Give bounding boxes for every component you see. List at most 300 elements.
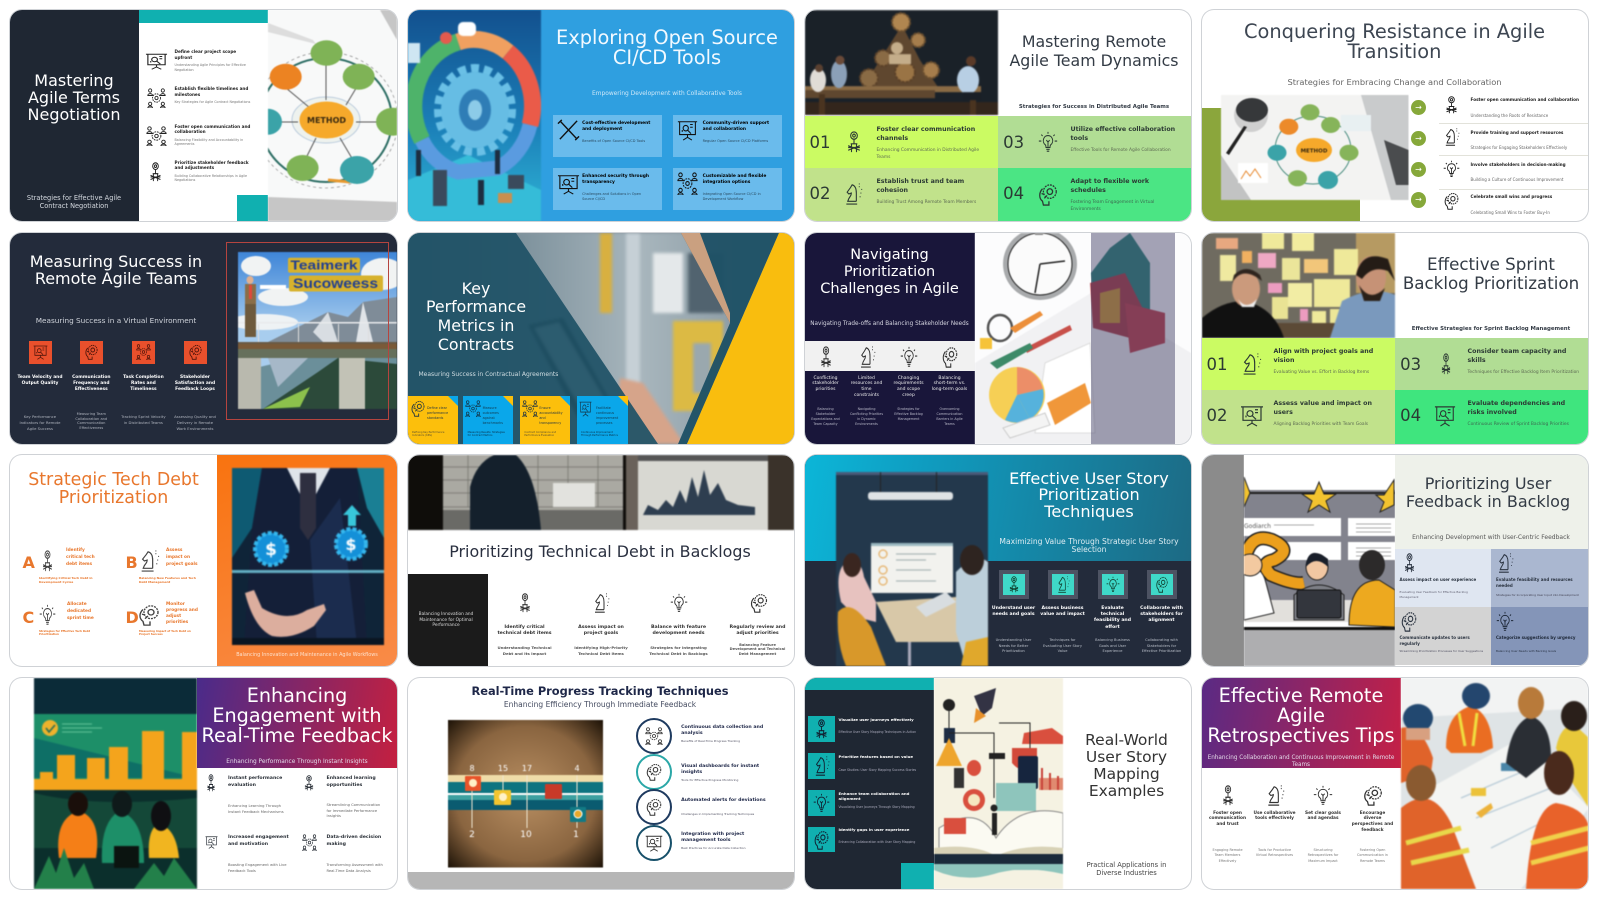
text: dedicated [67,609,91,614]
panel: Effective Remote Agile Retrospectives Tips [1202,678,1588,888]
title: Retrospectives Tips [1207,724,1395,746]
text: management tools [681,838,731,843]
quadrant 03 [1394,338,1588,390]
subtitle: Measuring Success in a Virtual Environment [36,316,196,324]
icon tile [808,716,834,742]
text: channels [876,134,908,142]
title: Examples [1089,782,1164,800]
technique 3 [636,788,794,824]
arrow 2: → [1415,134,1422,143]
text: Enhance team collaboration and [838,790,909,796]
text: Identify [66,548,85,553]
illustration: timeline on wood [448,720,602,868]
technique 4 [636,824,794,860]
icon: people [465,400,481,416]
illustration: team at laptop with stars: Godiarch [1244,523,1271,530]
quadrant 03 [998,116,1191,168]
column 2 [567,591,635,661]
title [10,254,222,288]
title: Negotiation [28,105,120,124]
photo: meeting room [836,472,988,666]
text: analysis [681,731,703,736]
quadrant 1 [1394,549,1490,607]
title [1244,20,1545,63]
box text [702,174,766,201]
column 1 [1204,784,1252,864]
icon: checklist [1438,353,1452,375]
panel: Key Performance Metrics in Contracts [408,232,794,444]
olive block [1202,108,1360,221]
title: Prioritization [844,264,935,280]
label: Understand user [992,606,1035,611]
text: opportunities [326,783,362,788]
photo: analyst at dashboards [408,455,794,530]
side box text: Performance [432,623,460,628]
label 1: Team Capacity [813,422,838,426]
subtitle: Effective Strategies for Sprint Backlog Management [1412,326,1570,332]
note: Team Members [1215,853,1240,857]
metric 3 [118,341,168,436]
metric 1 [15,341,65,436]
icon ring [636,789,672,825]
title [988,471,1190,521]
text: Assess impact on user experience [1400,577,1476,582]
text: Balancing User Needs with Backlog Goals [1496,649,1556,653]
panel: Exploring Open Source CI/CD Tools [408,10,794,221]
title: Agile Team Dynamics [1009,51,1179,70]
card 2 [463,396,513,444]
metric note [170,414,220,432]
illustration: construction team around blueprint [1400,678,1588,888]
card 4 [576,396,628,444]
step text: Involve stakeholders in decision-making [1470,162,1566,167]
photo: businessman with dollar gears: $ [345,535,357,554]
icon: person at board [205,834,218,848]
text: Categorize suggestions by urgency [1496,635,1575,640]
item D [125,601,215,641]
item text: Building Collaborative Relationships in Agile [174,174,247,178]
metric note: Key Performance [24,414,56,419]
metric note: Effectiveness [79,426,103,430]
panel: Effective User Story Prioritization Techniques [804,455,1191,666]
arrow 4 [1411,192,1426,208]
metric label: Timeliness [130,387,157,392]
photo: bridge and mountains: Teaimerk [290,257,358,272]
gradient header [197,678,397,768]
icon: board [558,175,580,194]
subtitle: Selection [1072,545,1106,554]
metric note [15,414,65,432]
title: Effective Sprint [1427,254,1555,274]
note: Measuring Impact of Tech Debt on [139,629,191,633]
metric note: Assessing Quality and [174,414,216,419]
metric note: Tracking Sprint Velocity [121,414,166,419]
title: Backlog Prioritization [1403,273,1579,293]
feature box 2 [673,115,782,157]
label: feasibility and [1094,618,1131,623]
card text: and [539,416,546,420]
title: Effective User Story [1009,469,1169,488]
metric label: Stakeholder [180,374,210,380]
metric label: Satisfaction and [175,381,215,386]
text [876,178,976,204]
item text: and adjustments [174,165,214,170]
step text [1470,130,1567,151]
text: debt items [66,562,92,567]
icon band [804,340,975,371]
item 2 [301,772,395,822]
text: cohesion [876,186,908,194]
title: Challenges in Agile [820,281,959,297]
text [1274,398,1372,428]
gradient header [804,455,1191,561]
teal corner block [237,195,268,221]
icon: target [818,346,834,368]
box text: integration options [703,180,750,185]
text [67,602,94,622]
column labels [804,376,974,436]
red frame [226,242,389,420]
text: Insights [326,814,341,818]
icon: board [146,54,168,70]
illustration: timeline on wood: 2 [469,830,474,840]
corner [503,396,513,406]
card 2: for Contract Metrics [468,434,492,437]
card text: improvement [596,416,618,420]
panel: Effective Sprint Backlog Prioritization [1202,232,1588,444]
icon: bulb [1496,611,1514,632]
label: Set clear goals [1305,810,1341,816]
subtitle: Teams [1292,762,1310,768]
dark side panel [10,10,138,221]
text: Visualize user journeys effectively [838,716,914,722]
card text: Measuring Results: Strategies [468,430,505,434]
text: users [1274,408,1293,416]
text: Establish trust and team [876,178,964,184]
title: Mapping [1093,764,1160,782]
text [1468,398,1569,428]
label: Encourage [1360,810,1385,816]
icon: chess knight [1442,128,1460,146]
panel: Conquering Resistance in Agile Transition [1202,10,1588,221]
note: Remote Teams [1360,859,1385,863]
illustration: timeline on wood: 15 [497,764,508,773]
column 4 [1138,570,1184,662]
label: technical debt items [497,631,552,636]
column 3 [1090,570,1136,662]
arrow 1: → [1415,103,1422,112]
note [1090,638,1136,655]
text: Assess [166,548,182,553]
metric note: in Distributed Teams [124,420,163,425]
icon: target [1442,96,1460,114]
item C [22,601,112,641]
label: communication [1209,816,1246,821]
note: Debt Management [139,580,170,584]
metric label [170,374,220,393]
box text: Benefits of Open Source CI/CD Tools [582,139,645,143]
box text: Challenges and Solutions in Open [582,192,641,196]
card text: Define clear [427,406,447,410]
item text: Establish flexible timelines and [174,86,248,91]
text: Transforming Assessment with [326,863,383,867]
photo: team with gear pyramid [805,10,999,116]
text: Communicate updates to users [1400,635,1470,640]
metric note: Collaboration and [75,417,107,421]
subtitle: Diverse Industries [1096,869,1157,877]
box text: transparency [582,180,615,185]
icon: target [205,774,217,792]
card text: Defining Key Performance [412,430,444,434]
subtitle: Empowering Development with Collaborative Tools [592,90,742,96]
note [490,644,558,657]
text [681,798,766,817]
label 2: resources and [851,381,882,386]
icon: target [1220,784,1236,806]
gradient header [1202,678,1400,768]
panel: Prioritizing Technical Debt in Backlogs [408,455,794,666]
label: Identify critical [504,624,545,630]
label 1: Balancing [817,407,834,411]
note [1138,638,1184,655]
text: Strategies for Incorporating User Input into Development [1496,593,1579,597]
technique 1 [636,718,794,754]
subtitle: Strategies for Success in Distributed Agile Teams [1019,104,1169,110]
icon: bulb [670,593,688,613]
subtitle: Measuring Success in Contractual Agreements [418,370,558,378]
title: Techniques [1044,502,1134,521]
photo: method diagram on desk [1220,94,1410,201]
column 1 [990,570,1036,662]
label 1: stakeholder [812,381,839,386]
text: vision [1274,356,1294,364]
title: Feedback in Backlog [1406,492,1570,511]
item text [174,124,250,146]
text: Prioritize features based on value [838,754,913,759]
title: Exploring Open Source [556,26,778,49]
card text [483,406,505,438]
box text: and collaboration [703,127,746,132]
card 3 [520,396,570,444]
label [724,624,792,637]
title: Remote Agile Teams [35,269,197,288]
text [838,827,915,845]
box text: Enhanced security through [582,174,649,179]
card text: benchmarks [483,421,503,425]
icon ring [636,825,672,861]
title: Conquering Resistance in Agile [1244,20,1545,43]
step text [1470,162,1566,183]
card text: Through Performance Metrics [581,434,618,437]
item text: Foster open communication and [174,124,250,129]
column 2 [1250,784,1298,864]
quadrant 3 [1394,607,1490,665]
number: 02 [1206,406,1228,425]
icon: chess knight [1240,353,1262,375]
icon: target [848,131,860,152]
note [139,576,196,584]
header block [1394,455,1588,549]
text: schedules [1070,186,1106,194]
column 4 [1348,784,1396,864]
label: technical [1101,612,1124,617]
illustration: timeline on wood: 1 [573,830,578,840]
text [1496,635,1575,654]
step text [1470,97,1579,118]
metric label: Rates and [131,381,156,386]
step 2 [1438,128,1588,155]
note [567,644,635,657]
number: 03 [1400,355,1421,374]
letter: C [22,608,34,627]
grey footer bar [408,872,794,888]
icon: data people [302,834,317,850]
label 2: Limited [858,376,875,380]
note: Experience [1102,649,1123,653]
item text [174,160,249,182]
box text: Community-driven support [703,121,769,126]
icon: chess knight [846,183,862,205]
text: Utilize effective collaboration [1070,126,1175,132]
text: Instant Feedback Mechanisms [228,810,284,814]
text: tools [1070,134,1088,142]
corner [618,396,628,406]
icon: chess knight [1264,784,1284,806]
icon: board [678,121,698,140]
arrow 2 [1411,131,1426,146]
illustration: method diagram [267,10,397,221]
title: Real-World [1085,730,1168,748]
photo: bridge and mountains: Sucoweess [293,274,378,290]
note: Debt and Its Impact [503,651,546,656]
note [724,642,792,656]
text [1468,346,1579,376]
icon: gear head [940,346,958,368]
item text: milestones [174,92,200,97]
illustration: team at laptop with stars [1244,455,1394,666]
text: Feedback Tools [228,869,256,873]
icon: bulb [1313,784,1333,806]
subtitle: Enhancing Performance Through Instant Insights [226,758,368,764]
metric label: Feedback Loops [175,387,215,392]
photo: two men and sticky notes [1202,232,1394,338]
title [1392,475,1584,510]
note [39,630,90,637]
note: Goals and User [1099,644,1126,648]
label 4: long-term goals [932,387,967,392]
icon: gear head [410,400,426,416]
column 2 [1040,570,1086,662]
subtitle: Enhancing Collaboration and Continuous Improvement in Remote [1208,755,1394,761]
panel: Navigating Prioritization Challenges in Agile [804,232,1191,444]
number: 01 [810,133,830,152]
text: for Immediate Performance [326,809,377,813]
column 4 [724,591,792,661]
arrow buttons [1411,100,1426,208]
list item 1 [808,716,932,742]
card text [539,406,563,438]
icon: bulb [1038,132,1058,152]
title: Prioritization [1038,485,1140,504]
metric label [15,374,65,387]
number: 04 [1003,184,1024,203]
card text: accountability [539,411,563,415]
text: Streamlining Communication [326,803,380,807]
text: Challenges in Implementing Tracking Techniques [681,812,754,816]
text: Boosting Engagement with Live [228,863,287,867]
text: Effective User Story Mapping Techniques in Action [838,730,916,734]
title: Enhancing [247,684,347,706]
icon ring [636,718,672,754]
label [990,606,1036,618]
step 4 [1438,192,1588,219]
subtitle: Strategies for Embracing Change and Collaboration [1287,77,1502,87]
label: Evaluate [1101,606,1124,611]
box text: Cost-effective development [582,121,650,126]
box text: and deployment [582,127,622,132]
card text: Measure [483,406,497,410]
teal corner block [901,862,934,888]
orange side panel [217,455,397,666]
label: value and impact [1040,612,1085,617]
text [1496,577,1579,597]
metric label: Effectiveness [75,387,108,392]
subtitle [988,538,1190,555]
subtitle [27,194,121,210]
subtitle: Strategies for Effective Agile [27,194,121,202]
note [39,576,93,584]
label 3: and scope [897,387,920,392]
title: Mastering Remote [1022,32,1166,51]
subtitle: Enhancing Efficiency Through Immediate Feedback [504,700,696,708]
grey strip [1202,455,1244,666]
text: Visual dashboards for instant [681,764,759,769]
label [1348,810,1396,834]
icon: people [522,400,538,416]
text: Align with project goals and [1274,348,1373,354]
title: Mastering [34,71,114,90]
icon: gear head [137,604,161,626]
note: Development Cycles [39,580,73,584]
illustration: method diagram: METHOD [307,116,346,125]
text: Integration with project [681,832,744,837]
column 1 [490,591,558,661]
illustration: open book and machines [934,678,1062,888]
label 3: Effective Backlog [894,412,923,416]
label [1204,810,1252,828]
label: stakeholders for [1140,612,1183,617]
title [804,246,974,298]
illustration: timeline on wood: 4 [574,764,579,773]
label [1040,606,1086,618]
photo: bridge and mountains [238,252,397,408]
note: Balancing New Features and Tech [139,576,196,580]
icon ring [636,754,672,790]
text: Management [1400,595,1419,599]
label 4: Barriers in Agile [936,417,963,421]
label 2: Conflicting Priorities [850,412,883,416]
title: Agile Terms [28,88,120,107]
icon: gear head [1039,184,1057,206]
text [681,725,763,744]
list item 2 [147,86,250,108]
note: Engaging Remote [1212,848,1243,852]
label 4: Communication [936,412,962,416]
subtitle: Navigating Trade-offs and Balancing Stakeholder Needs [810,321,969,327]
text [681,832,745,851]
label: project goals [584,631,618,636]
text: Enhancing Communication in Distributed Agile [876,148,979,152]
